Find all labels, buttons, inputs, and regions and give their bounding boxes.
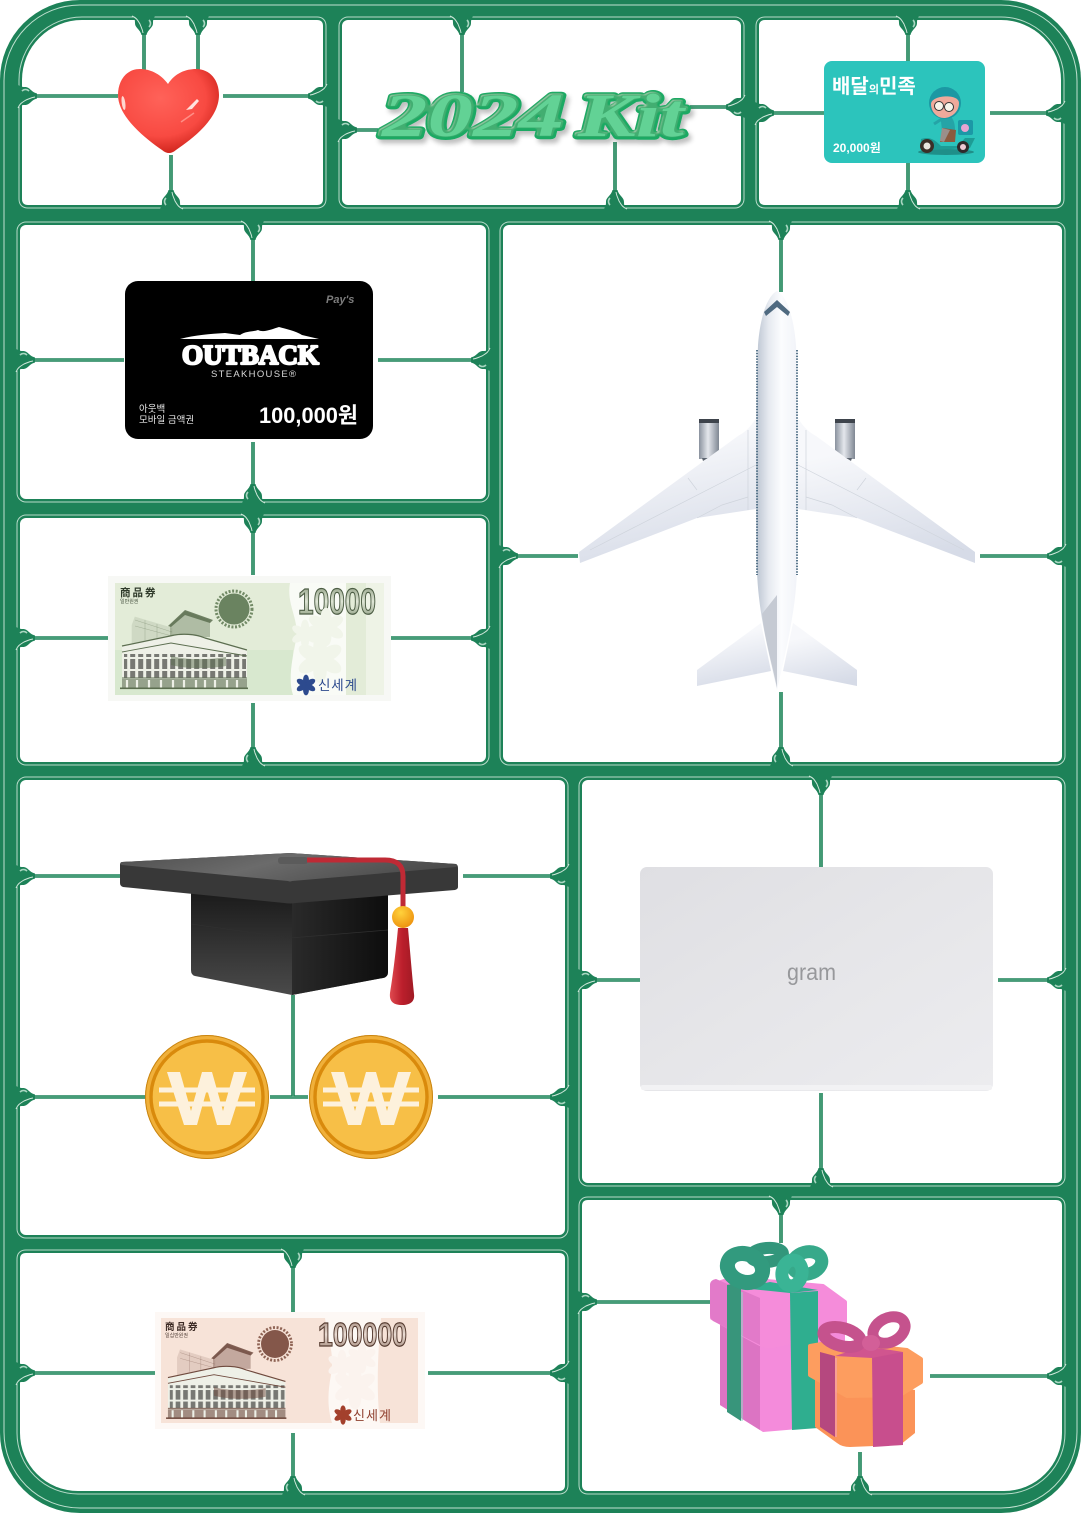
gift card: Outback 100,000 won: 아웃백 — [139, 404, 165, 415]
gift card: Outback 100,000 won: Pay's — [326, 294, 354, 306]
gift card: Outback 100,000 won: OUTBACK — [182, 340, 319, 370]
green bow — [723, 1247, 824, 1288]
gift card: Outback 100,000 won — [125, 281, 373, 439]
gift card: Outback 100,000 won: 모바일 금액권 — [139, 414, 194, 426]
gift voucher: Shinsegae 10,000 won: 10000 — [298, 581, 376, 622]
illustration: department store — [166, 1343, 286, 1419]
icon: outback mountain — [180, 327, 319, 339]
title: Kit — [577, 83, 687, 150]
small orange box — [810, 1311, 921, 1447]
icon: gift boxes — [710, 1247, 921, 1447]
icon: pale blossoms — [291, 608, 345, 683]
title: 2024 — [381, 83, 564, 150]
gift card: Outback 100,000 won: STEAKHOUSE® — [211, 369, 296, 380]
gift card: Baemin 20,000 won: 20,000원 — [833, 141, 881, 155]
icon: seal — [216, 591, 252, 627]
icon: red heart — [118, 69, 219, 153]
icon: left won coin — [145, 1035, 269, 1159]
gift voucher: Shinsegae 10,000 won — [108, 576, 391, 701]
gift voucher: Shinsegae 10,000 won: 商品券 — [120, 586, 158, 599]
gift card: Baemin 20,000 won: 배달의민족 — [832, 75, 916, 98]
magenta bow — [821, 1311, 910, 1351]
icon: graduation cap — [120, 853, 458, 1005]
gift voucher: Shinsegae 100,000 won: 商品券 — [165, 1321, 200, 1333]
icon: pale blossoms — [327, 1343, 378, 1409]
icon: seal — [258, 1328, 292, 1360]
gift voucher: Shinsegae 100,000 won — [155, 1312, 425, 1429]
icon: right won coin — [309, 1035, 433, 1159]
gift card: Outback 100,000 won: 100,000원 — [259, 403, 358, 428]
gift voucher: Shinsegae 10,000 won: 일만원권 — [120, 598, 139, 605]
engines — [699, 419, 855, 459]
fuselage — [756, 291, 798, 690]
gift voucher: Shinsegae 100,000 won: 일십만원권 — [165, 1332, 188, 1339]
gift voucher: Shinsegae 100,000 won: 100000 — [318, 1316, 407, 1353]
large pink box — [710, 1247, 845, 1432]
tailplane — [697, 623, 771, 686]
LG gram laptop lid — [640, 867, 993, 1091]
illustration: department store — [120, 610, 248, 689]
LG gram laptop lid: gram — [787, 959, 836, 985]
airplane — [579, 291, 975, 690]
wings — [579, 418, 756, 563]
gift voucher: Shinsegae 10,000 won: 신세계 — [318, 678, 357, 693]
gift card: Baemin 20,000 won — [824, 61, 985, 163]
icon: delivery rider on scooter — [918, 87, 975, 155]
gift voucher: Shinsegae 100,000 won: 신세계 — [353, 1408, 391, 1423]
